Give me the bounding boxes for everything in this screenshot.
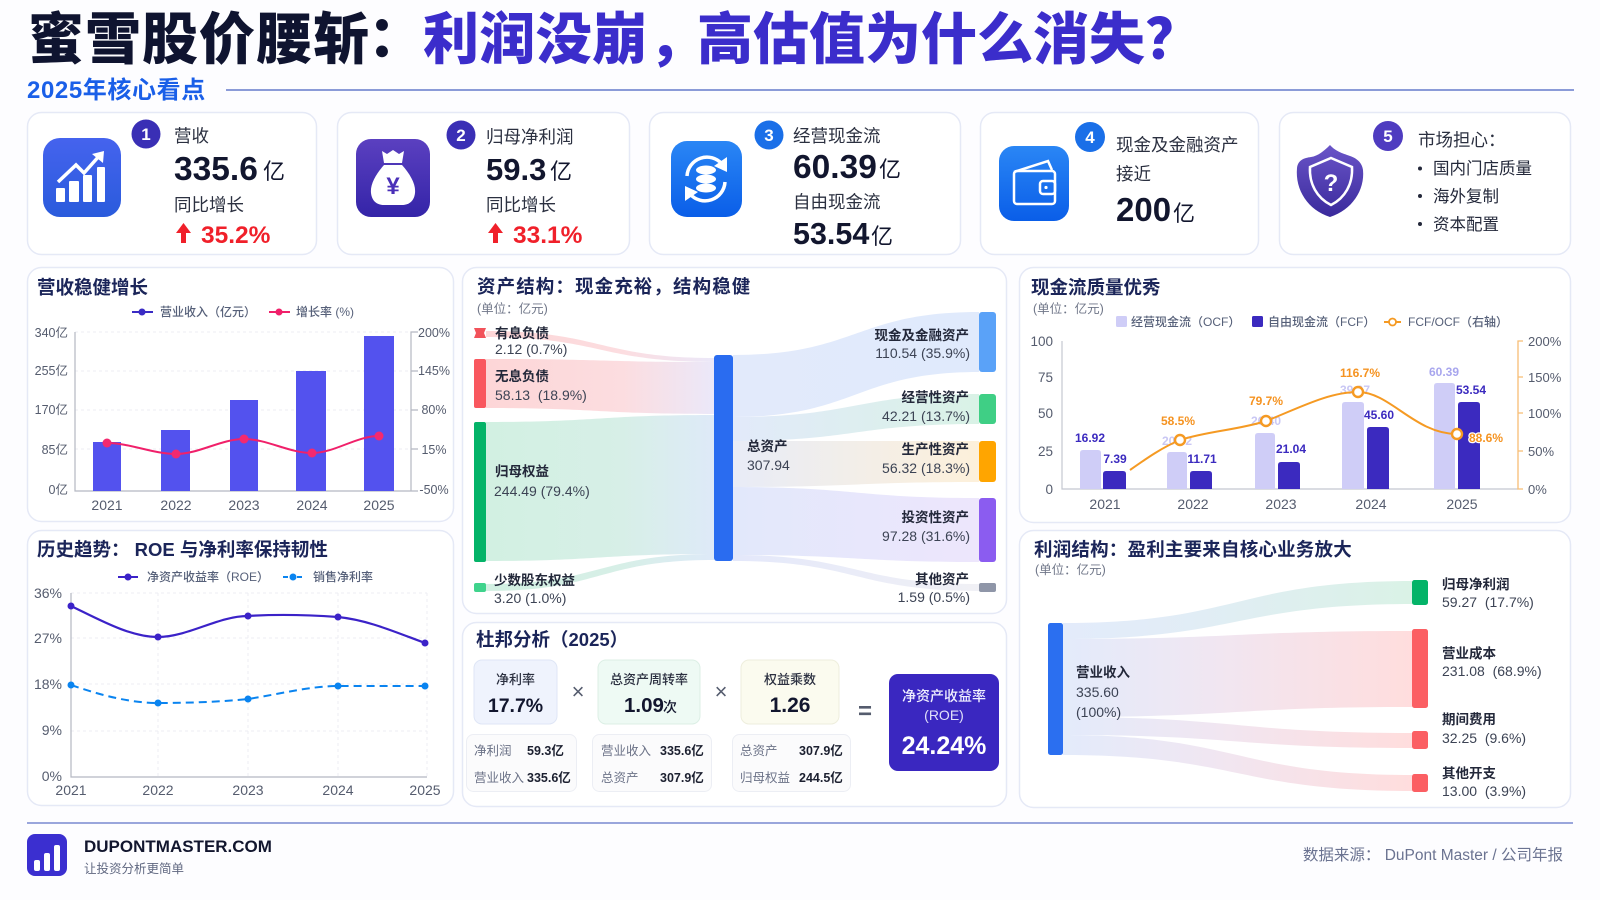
bar and line chart: 100% <box>1528 406 1562 421</box>
multiply sign: × <box>572 679 584 704</box>
badge 3: 3 <box>764 126 774 145</box>
right labels: 经营性资产 <box>902 389 969 405</box>
line chart: 36% <box>34 585 62 601</box>
bar and line chart <box>35 325 450 513</box>
card 4: cash and financial assets <box>980 112 1258 254</box>
value: 200: 亿 <box>1173 201 1195 226</box>
target labels: 13.00 (3.9%) <box>1442 783 1526 799</box>
panel: cash flow quality <box>1020 268 1570 522</box>
subtitle: 2025 key points: 2025年核心看点 <box>27 77 206 104</box>
right labels: 110.54 (35.9%) <box>875 345 970 361</box>
value: 335.6: 亿 <box>263 159 285 184</box>
heading: 营收稳健增长 <box>37 277 148 298</box>
bar and line chart: 2024 <box>1355 496 1387 512</box>
target labels: 其他开支 <box>1442 765 1496 781</box>
legend: 营业收入（亿元） <box>160 304 256 319</box>
right labels: 其他资产 <box>915 571 969 587</box>
bar and line chart: 2023 <box>1265 496 1297 512</box>
breakdown: equity multiplier: 归母权益 <box>740 770 790 785</box>
label: revenue: 营收 <box>174 126 209 146</box>
bar and line chart: 75 <box>1038 370 1053 385</box>
line chart: 2024 <box>322 782 354 798</box>
legend: 销售净利率 <box>313 569 373 584</box>
bar and line chart: 16.92 <box>1075 431 1105 445</box>
legend <box>118 569 373 584</box>
legend: FCF/OCF（右轴） <box>1408 314 1508 329</box>
legend: 自由现金流（FCF） <box>1268 314 1375 329</box>
label: FCF: 自由现金流 <box>793 192 880 212</box>
left labels: 无息负债 <box>495 368 549 384</box>
legend <box>132 304 354 319</box>
title <box>28 8 1201 71</box>
box: net margin: 净利率 <box>496 672 535 687</box>
bar and line chart: 25 <box>1038 444 1053 459</box>
left labels: 少数股东权益 <box>494 572 575 588</box>
heading: 现金流质量优秀 <box>1031 277 1161 298</box>
title: 利润没崩， <box>423 8 704 71</box>
line chart: 18% <box>34 676 62 692</box>
breakdown: asset turnover: 营业收入 <box>601 744 652 758</box>
box: net margin <box>474 660 557 724</box>
badge 2 <box>446 120 476 150</box>
bar and line chart: 80% <box>421 403 447 417</box>
bar and line chart: 50% <box>1528 444 1554 459</box>
left labels: 归母权益 <box>495 463 549 479</box>
bullet list: 国内门店质量 <box>1433 159 1532 178</box>
nodes <box>1048 580 1428 792</box>
data source: 数据来源： DuPont Master / 公司年报 <box>1303 846 1563 864</box>
sankey flows <box>1063 581 1412 791</box>
left labels: 58.13 (18.9%) <box>495 387 587 403</box>
line chart: 2022 <box>142 782 174 798</box>
box: equity multiplier <box>741 660 839 724</box>
bar and line chart: 170亿 <box>35 402 68 417</box>
target labels: 32.25 (9.6%) <box>1442 730 1526 746</box>
value: 53.54: 亿 <box>871 224 893 249</box>
legend: 增长率 (%) <box>296 304 354 319</box>
target labels: 期间费用 <box>1442 712 1496 727</box>
bar and line chart: 340亿 <box>35 325 68 340</box>
bullet list: 资本配置 <box>1433 215 1499 234</box>
source label: (100%) <box>1076 704 1121 720</box>
bar and line chart: 15% <box>421 443 447 457</box>
title: ： <box>354 8 410 71</box>
right labels <box>874 327 970 605</box>
label: YoY growth: 同比增长 <box>486 195 556 215</box>
title: 高估值为什么消失？ <box>697 8 1201 71</box>
value: 60.39: 60.39 <box>793 149 877 186</box>
bar and line chart: 26.40 <box>1251 414 1281 428</box>
badge 3 <box>754 120 784 150</box>
line chart: 2021 <box>55 782 87 798</box>
arrow up <box>176 223 191 243</box>
box: asset turnover: 次 <box>663 699 677 715</box>
sankey flows <box>486 312 979 591</box>
icon: shield question <box>1297 145 1363 217</box>
line chart: 2025 <box>409 782 441 798</box>
equals sign: = <box>858 698 872 725</box>
box: equity multiplier: 1.26 <box>770 694 810 717</box>
line chart <box>34 585 441 798</box>
breakdown: asset turnover <box>592 734 712 792</box>
bar and line chart: 53.54 <box>1456 383 1486 397</box>
icon: shield question: ? <box>1324 170 1338 197</box>
card 1: revenue <box>28 112 316 254</box>
breakdown: net margin: 净利润 <box>474 744 512 758</box>
card 5: market concerns <box>1280 112 1570 254</box>
target labels: 231.08 (68.9%) <box>1442 663 1542 679</box>
unit note: (单位：亿元) <box>1033 301 1104 316</box>
growth value: 33.1% <box>513 222 583 249</box>
brand name: DUPONTMASTER.COM <box>84 837 272 856</box>
breakdown: net margin <box>466 734 576 792</box>
bar and line chart: 85亿 <box>42 442 68 457</box>
bar and line chart: 60.39 <box>1429 365 1459 379</box>
bar and line chart: 11.71 <box>1187 452 1217 466</box>
icon: rising bars <box>43 138 121 217</box>
legend: 经营现金流（OCF） <box>1131 314 1240 329</box>
bar and line chart: 79.7% <box>1249 394 1283 408</box>
left labels <box>494 325 590 606</box>
footer <box>27 822 1573 876</box>
bar and line chart: 0% <box>1528 482 1547 497</box>
panel: asset structure sankey <box>462 268 1006 614</box>
badge 2: 2 <box>456 126 466 145</box>
right labels: 56.32 (18.3%) <box>882 460 970 476</box>
breakdown: equity multiplier: 总资产 <box>740 744 778 758</box>
value: 53.54: 53.54 <box>793 217 869 251</box>
source label: 营业收入 <box>1076 664 1130 680</box>
center label <box>747 438 790 473</box>
breakdown: net margin: 335.6亿 <box>527 770 571 785</box>
icon: money bag: ¥ <box>386 173 400 200</box>
logo <box>27 834 67 876</box>
breakdown: net margin: 营业收入 <box>474 771 525 785</box>
icon: cash cycle <box>671 141 742 217</box>
target labels: 营业成本 <box>1442 645 1496 661</box>
right labels: 投资性资产 <box>902 509 969 525</box>
line chart: 9% <box>42 722 62 738</box>
bar and line chart: 2025 <box>1446 496 1478 512</box>
box: net margin: 17.7% <box>488 695 543 717</box>
panel: DuPont analysis <box>462 622 1006 806</box>
center label: 总资产 <box>747 438 788 454</box>
source label: 335.60 <box>1076 684 1119 700</box>
heading: 利润结构：盈利主要来自核心业务放大 <box>1034 539 1352 560</box>
label: cash and financial assets <box>1116 135 1238 184</box>
bar and line chart: -50% <box>419 483 449 497</box>
card 2: net profit <box>338 112 630 254</box>
heading: 资产结构：现金充裕，结构稳健 <box>477 276 751 297</box>
bar and line chart: 2023 <box>228 497 260 513</box>
bar and line chart: 2024 <box>296 497 328 513</box>
bar and line chart: 255亿 <box>35 363 68 378</box>
box: ROE result: 24.24% <box>902 732 986 760</box>
bar and line chart: 0亿 <box>49 482 68 497</box>
badge 5: 5 <box>1383 127 1393 146</box>
bar and line chart: 200% <box>1528 334 1562 349</box>
bar and line chart: 116.7% <box>1340 366 1380 380</box>
bar and line chart: 21.04 <box>1276 442 1306 456</box>
right labels: 42.21 (13.7%) <box>882 408 970 424</box>
bar and line chart: 150% <box>1528 370 1562 385</box>
value: 59.3: 59.3 <box>486 152 546 187</box>
panel: ROE and net margin history <box>28 530 454 806</box>
bullet list <box>1418 159 1532 234</box>
breakdown: asset turnover: 335.6亿 <box>660 743 704 758</box>
growth value: 35.2% <box>201 222 271 249</box>
legend <box>1116 314 1508 329</box>
bar and line chart: 2022 <box>1177 496 1209 512</box>
unit note: (单位：亿元) <box>477 301 548 316</box>
bar and line chart <box>1030 334 1562 512</box>
value: 200: 200 <box>1116 191 1171 228</box>
line chart: 27% <box>34 630 62 646</box>
box: asset turnover: 总资产周转率 <box>610 672 688 687</box>
box: ROE result: 净资产收益率 <box>902 688 986 704</box>
left labels: 244.49 (79.4%) <box>494 483 590 499</box>
bar and line chart: 2021 <box>91 497 123 513</box>
left labels: 2.12 (0.7%) <box>495 341 567 357</box>
title: 蜜雪股价腰斩 <box>28 8 370 71</box>
box: equity multiplier: 权益乘数 <box>764 672 816 687</box>
value: 335.6: 335.6 <box>174 151 258 188</box>
value: 60.39: 亿 <box>879 157 901 182</box>
label: market concerns: 市场担心： <box>1418 130 1506 150</box>
label: cash and financial assets: 接近 <box>1116 164 1151 184</box>
legend: 净资产收益率（ROE） <box>147 569 269 584</box>
tagline: 让投资分析更简单 <box>84 861 184 876</box>
target labels <box>1442 576 1542 799</box>
box: ROE result: (ROE) <box>924 707 964 723</box>
source label <box>1076 664 1130 720</box>
bar and line chart: 20.02 <box>1162 434 1192 448</box>
badge 4: 4 <box>1085 128 1095 147</box>
left labels: 3.20 (1.0%) <box>494 590 566 606</box>
breakdown: net margin: 59.3亿 <box>527 743 564 758</box>
badge 1 <box>132 120 160 148</box>
bar and line chart: 145% <box>418 364 450 378</box>
heading: 历史趋势： ROE 与净利率保持韧性 <box>37 539 328 560</box>
breakdown: equity multiplier: 244.5亿 <box>799 770 843 785</box>
box: asset turnover: 1.09 <box>624 694 664 717</box>
bar and line chart: 39.07 <box>1340 383 1370 397</box>
icon: money bag <box>356 139 430 217</box>
center label: 307.94 <box>747 457 790 473</box>
bullet list: 海外复制 <box>1433 187 1499 206</box>
multiply sign: × <box>715 679 727 704</box>
breakdown: equity multiplier: 307.9亿 <box>799 743 843 758</box>
left labels: 有息负债 <box>495 325 549 341</box>
panel: revenue growth <box>28 268 454 522</box>
box: asset turnover <box>598 660 700 724</box>
line chart: 0% <box>42 768 62 784</box>
target labels: 归母净利润 <box>1442 576 1510 592</box>
bar and line chart: 2021 <box>1089 496 1121 512</box>
bar and line chart: 88.6% <box>1469 431 1503 445</box>
label: OCF: 经营现金流 <box>793 126 880 146</box>
bar and line chart: 100 <box>1030 334 1053 349</box>
bar and line chart: 58.5% <box>1161 414 1195 428</box>
breakdown: equity multiplier <box>732 734 850 792</box>
unit note: (单位：亿元) <box>1035 562 1106 577</box>
label: cash and financial assets: 现金及金融资产 <box>1116 135 1238 155</box>
bar and line chart: 2025 <box>363 497 395 513</box>
bar and line chart: 7.39 <box>1103 452 1127 466</box>
right labels: 现金及金融资产 <box>874 327 969 343</box>
bar and line chart: 2022 <box>160 497 192 513</box>
nodes <box>474 312 996 592</box>
badge 4 <box>1075 122 1105 152</box>
bar and line chart: 0 <box>1045 482 1053 497</box>
badge 1: 1 <box>141 125 151 144</box>
label: net profit: 归母净利润 <box>486 127 574 147</box>
right labels: 生产性资产 <box>902 441 969 457</box>
arrow up <box>488 223 503 243</box>
right labels: 97.28 (31.6%) <box>882 528 970 544</box>
line chart: 2023 <box>232 782 264 798</box>
icon: wallet <box>999 146 1069 221</box>
panel: profit structure sankey <box>1020 530 1570 808</box>
card 3: operating cash flow <box>650 112 960 254</box>
bar and line chart: 50 <box>1038 406 1053 421</box>
value: 59.3: 亿 <box>550 159 572 184</box>
breakdown: asset turnover: 总资产 <box>601 771 639 785</box>
value: 200 <box>1116 191 1195 228</box>
badge 5 <box>1373 121 1403 151</box>
heading: 杜邦分析（2025） <box>476 629 628 650</box>
box: ROE result <box>889 674 999 771</box>
bar and line chart: 45.60 <box>1364 408 1394 422</box>
breakdown: asset turnover: 307.9亿 <box>660 770 704 785</box>
bar and line chart: 200% <box>418 326 450 340</box>
label: YoY growth: 同比增长 <box>174 195 244 215</box>
right labels: 1.59 (0.5%) <box>898 589 970 605</box>
target labels: 59.27 (17.7%) <box>1442 594 1534 610</box>
